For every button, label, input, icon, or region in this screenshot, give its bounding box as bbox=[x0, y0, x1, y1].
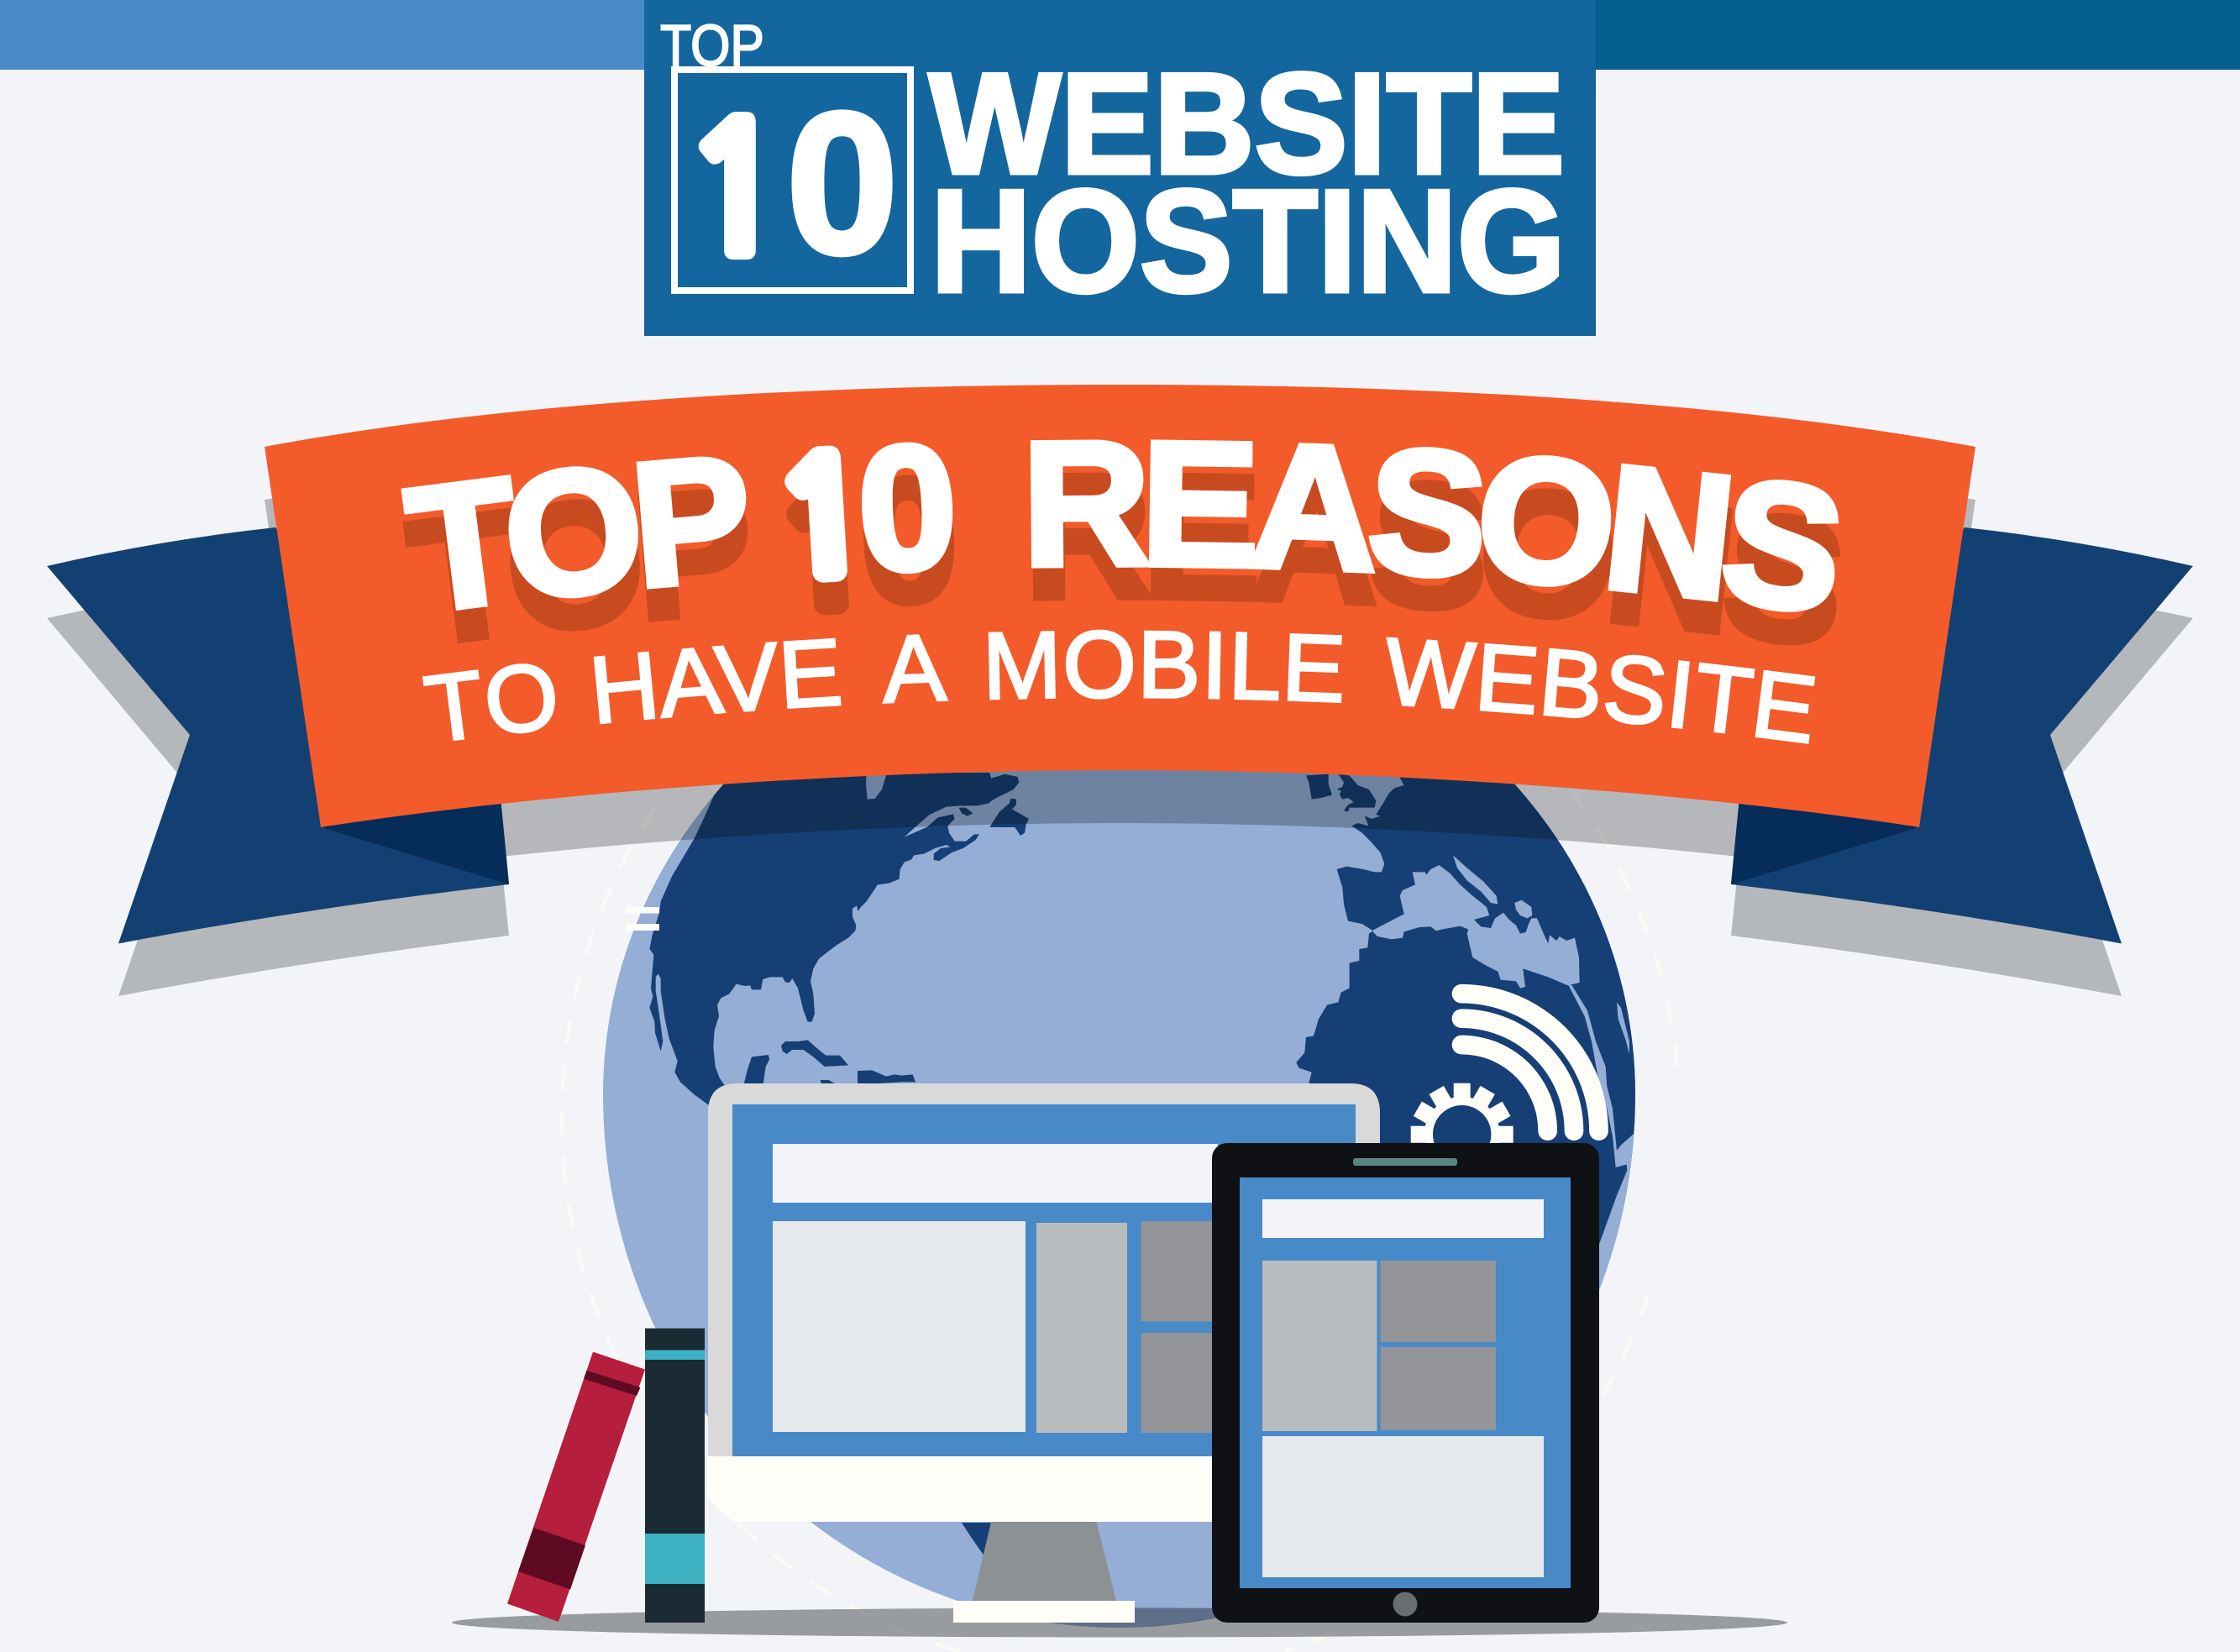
screen tile top bbox=[1141, 1221, 1219, 1322]
ocean: east rim bbox=[1599, 1130, 1634, 1277]
screen main panel bbox=[773, 1221, 1026, 1432]
land: Arctic island bbox=[959, 808, 973, 816]
icon: gear bbox=[1411, 1083, 1513, 1172]
land: small island bbox=[820, 1080, 835, 1083]
monitor stand base bbox=[953, 1601, 1135, 1623]
tablet bbox=[1212, 1143, 1599, 1623]
small white bars bbox=[626, 907, 659, 931]
red book stripe wide bbox=[518, 1528, 585, 1589]
tablet screen bbox=[1240, 1177, 1571, 1588]
subtitle: To have a mobile website: TO HAVE A MOBILE WEBSITE bbox=[422, 630, 1816, 744]
ribbon tail: right bbox=[1731, 527, 2193, 944]
land: Europe and Africa bbox=[1296, 773, 1671, 1277]
tablet body bbox=[1212, 1143, 1599, 1623]
land: Greenland tip bbox=[989, 799, 1029, 836]
header bar: right bbox=[1596, 0, 2240, 70]
monitor stand bbox=[973, 1522, 1116, 1601]
logo text: 10: 1 bbox=[682, 103, 790, 280]
ground shadow bbox=[452, 1607, 1787, 1638]
tablet tile top bbox=[1381, 1261, 1496, 1342]
logo: Top 10 Website Hosting bbox=[644, 0, 1596, 336]
land: Cuba bbox=[781, 1040, 848, 1067]
title shadow: TOP 10 REASONS bbox=[402, 472, 1841, 645]
dashed orbit ring bbox=[562, 789, 1677, 1651]
dark book bbox=[645, 1329, 705, 1623]
tablet header block bbox=[1262, 1199, 1544, 1238]
red book stripe thin bbox=[584, 1371, 640, 1396]
land: North America bbox=[649, 773, 1029, 1123]
tablet tile bottom bbox=[1381, 1347, 1496, 1430]
desktop monitor bbox=[707, 1083, 1380, 1522]
logo text: 10: 0 bbox=[786, 71, 898, 296]
globe land masses bbox=[649, 773, 1671, 1556]
screen header block bbox=[773, 1144, 1218, 1203]
red book bbox=[507, 1352, 645, 1622]
land: Eurasia and Africa bbox=[1296, 778, 1635, 1249]
screen tile bottom bbox=[1141, 1333, 1219, 1433]
monitor screen bbox=[732, 1104, 1356, 1456]
ocean: Red Sea bbox=[1568, 984, 1618, 1165]
header bar: left bbox=[0, 0, 644, 70]
book band wide bbox=[645, 1534, 705, 1584]
tablet bottom panel bbox=[1262, 1436, 1544, 1577]
tablet side panel bbox=[1262, 1261, 1377, 1431]
tablet speaker bbox=[1353, 1158, 1457, 1166]
title: Top 10 Reasons: TOP 10 REASONS bbox=[401, 439, 1839, 612]
land: Yucatan bbox=[744, 1055, 769, 1083]
ribbon tail: left bbox=[47, 527, 509, 944]
tablet home button bbox=[1393, 1592, 1418, 1616]
globe ocean bbox=[603, 611, 1635, 1628]
monitor frame bbox=[708, 1083, 1380, 1461]
ribbon tail shadows bbox=[47, 580, 2193, 996]
screen side panel bbox=[1036, 1223, 1127, 1433]
logo text: TOP: TOP bbox=[660, 13, 764, 78]
ribbon fold: right bbox=[1731, 798, 1919, 884]
land: South America tip bbox=[962, 1523, 993, 1556]
ribbon fold: left bbox=[321, 798, 509, 884]
icon: wifi signal bbox=[1452, 984, 1608, 1141]
land: Iceland bbox=[1306, 774, 1332, 800]
land: British Isles bbox=[1337, 774, 1376, 812]
monitor chin bbox=[707, 1456, 1260, 1522]
logo text: HOSTING: HOSTING bbox=[931, 159, 1566, 323]
banner drop shadow bbox=[265, 438, 1975, 880]
book band thin bbox=[645, 1350, 705, 1360]
ocean: Mediterranean bbox=[1373, 865, 1580, 989]
ocean: Persian Gulf bbox=[1617, 1002, 1629, 1054]
globe bbox=[603, 770, 1635, 1628]
orange banner bbox=[265, 385, 1975, 827]
ocean: Aegean bbox=[1514, 900, 1532, 918]
logo box bbox=[674, 70, 910, 291]
ocean: Adriatic bbox=[1453, 855, 1498, 905]
logo text: WEBSITE: WEBSITE bbox=[929, 44, 1565, 204]
land: Hispaniola bbox=[858, 1070, 915, 1085]
